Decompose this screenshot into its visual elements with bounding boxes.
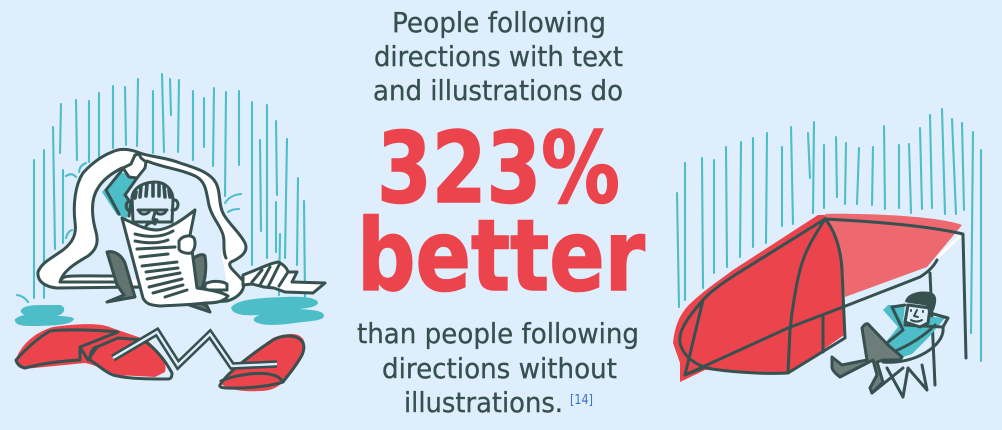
illustration: confused man with tangled tent [15, 74, 325, 391]
newspaper [122, 210, 228, 306]
chair [872, 325, 943, 397]
hand on newspaper [179, 236, 195, 253]
big statistic: 323% better: 323% [377, 112, 620, 226]
head [905, 305, 930, 327]
illustration: relaxed man under assembled tent [673, 109, 981, 397]
raised hand [123, 154, 146, 178]
left leg [107, 252, 135, 302]
arm behind head [887, 305, 948, 343]
face [911, 310, 923, 322]
blanket inner opening [60, 165, 226, 282]
tent light red panel [825, 214, 962, 297]
puddle: right [231, 297, 324, 325]
white gap beside cable [937, 236, 960, 258]
rain: right [677, 109, 981, 361]
rain: left [17, 74, 305, 302]
closing text with citation: illustrations. [404, 387, 563, 419]
foot under paper [186, 302, 210, 312]
closing text with citation: [14] [570, 393, 593, 408]
blanket [38, 149, 246, 305]
reaching hand and sheet [243, 262, 325, 293]
zigzag rod [113, 332, 277, 366]
left flipper outline [16, 330, 172, 379]
knee patch [205, 281, 227, 290]
closing text with citation: directions without [382, 353, 617, 385]
right flipper outline [220, 336, 304, 388]
red flipper: left [15, 324, 166, 377]
relaxed man [832, 291, 948, 397]
closing text with citation [357, 318, 639, 419]
right leg [186, 255, 206, 290]
puddle: left [15, 305, 74, 326]
heading: intro text: and illustrations do [373, 75, 623, 107]
red flipper: right [221, 334, 305, 391]
leg [832, 324, 902, 393]
heading: intro text: directions with text [374, 41, 623, 73]
raised teal arm [102, 172, 138, 218]
big statistic: 323% better: better [357, 199, 645, 314]
heading: intro text: People following [392, 7, 606, 39]
teal shirt [883, 305, 945, 358]
big statistic: 323% better [357, 112, 645, 314]
hair [905, 291, 936, 318]
tent frame [680, 219, 966, 385]
closing text with citation: than people following [357, 318, 639, 350]
tent dark red panel [673, 215, 844, 382]
man's head [126, 182, 178, 226]
heading: intro text [373, 7, 623, 107]
